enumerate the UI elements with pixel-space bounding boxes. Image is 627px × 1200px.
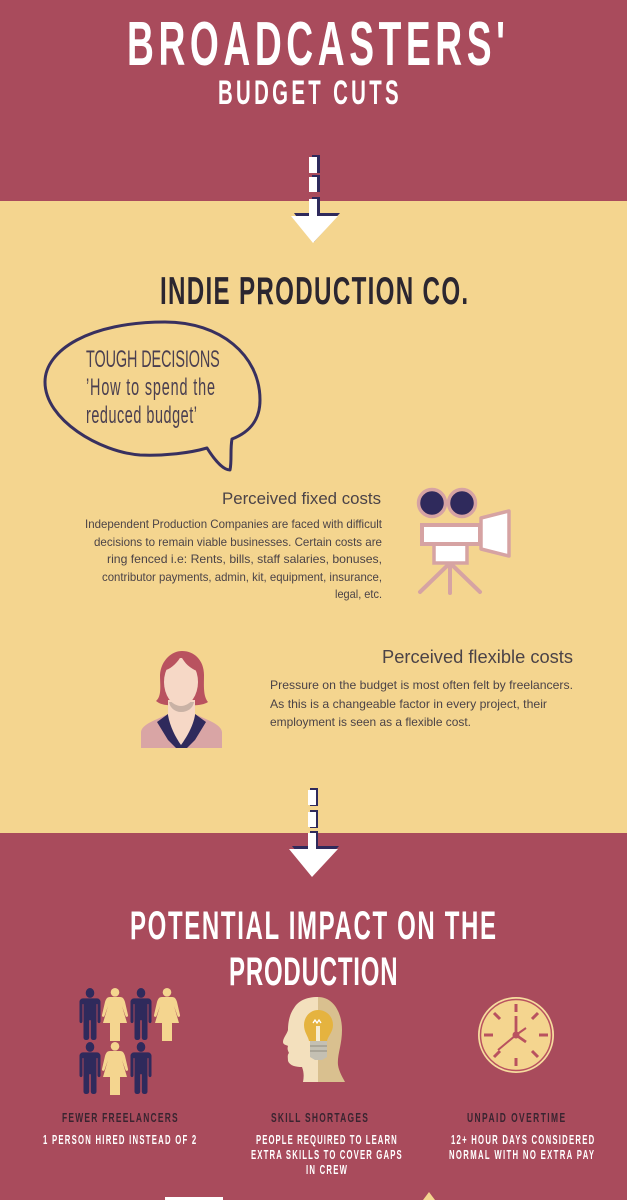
text block: perceived fixed costs: Independent Production Companies are faced with difficult xyxy=(85,518,383,531)
icon: group of people xyxy=(80,988,180,1095)
text block: unpaid overtime: UNPAID OVERTIME xyxy=(467,1111,565,1126)
text block: perceived fixed costs: ring fenced i.e: Rents, bills, staff salaries, bonuses, xyxy=(107,553,382,566)
cropped white box at bottom edge xyxy=(165,1197,223,1200)
callout: tough decisions: TOUGH DECISIONS xyxy=(86,346,220,373)
text block: perceived fixed costs xyxy=(85,489,383,601)
panel: header band xyxy=(0,0,627,201)
title xyxy=(127,9,505,111)
icon: head with light bulb xyxy=(283,997,345,1082)
text block: perceived flexible costs: Perceived flexible costs xyxy=(382,647,573,667)
text block: perceived fixed costs: legal, etc. xyxy=(335,588,382,601)
text block: skill shortages xyxy=(251,1111,402,1178)
text block: unpaid overtime xyxy=(449,1111,595,1163)
heading: potential impact: PRODUCTION xyxy=(229,949,398,993)
text block: unpaid overtime: 12+ HOUR DAYS CONSIDERED xyxy=(451,1134,595,1148)
heading: potential impact xyxy=(130,903,496,993)
text block: perceived flexible costs: As this is a changeable factor in every project, their xyxy=(270,697,547,711)
text block: perceived fixed costs: Perceived fixed costs xyxy=(222,489,381,508)
cropped yellow triangle at bottom edge xyxy=(423,1192,435,1200)
title: BROADCASTERS' xyxy=(127,9,505,78)
heading: potential impact: POTENTIAL IMPACT ON THE xyxy=(130,903,496,947)
text block: perceived fixed costs: contributor payments, admin, kit, equipment, insurance, xyxy=(102,571,382,584)
text block: skill shortages: SKILL SHORTAGES xyxy=(271,1111,368,1126)
arrow: header to indie xyxy=(291,155,340,243)
title: BUDGET CUTS xyxy=(218,74,399,111)
text block: fewer freelancers: 1 PERSON HIRED INSTEAD OF 2 xyxy=(43,1134,196,1148)
arrow: indie to impact xyxy=(289,788,339,877)
icon: woman portrait xyxy=(141,651,222,748)
text block: skill shortages: IN CREW xyxy=(306,1164,347,1178)
heading: indie production: INDIE PRODUCTION CO. xyxy=(160,269,468,312)
text block: fewer freelancers: FEWER FREELANCERS xyxy=(62,1111,178,1126)
text block: perceived flexible costs: employment is seen as a flexible cost. xyxy=(270,715,471,729)
panel: indie production band xyxy=(0,201,627,833)
icon: clock xyxy=(478,997,554,1073)
callout: tough decisions xyxy=(45,322,260,470)
text block: skill shortages: EXTRA SKILLS TO COVER GAPS xyxy=(251,1149,402,1163)
text block: perceived flexible costs xyxy=(270,647,573,729)
text block: perceived flexible costs: Pressure on the budget is most often felt by freelancers. xyxy=(270,678,573,692)
callout: tough decisions: ’How to spend the xyxy=(86,374,215,401)
text block: perceived fixed costs: decisions to remain viable businesses. Certain costs are xyxy=(94,536,382,549)
icon: film camera xyxy=(418,490,509,593)
text block: fewer freelancers xyxy=(43,1111,196,1148)
text block: unpaid overtime: NORMAL WITH NO EXTRA PAY xyxy=(449,1149,594,1163)
text block: skill shortages: PEOPLE REQUIRED TO LEARN xyxy=(256,1134,397,1148)
panel: impact band xyxy=(0,833,627,1200)
callout: tough decisions: reduced budget’ xyxy=(86,402,197,429)
